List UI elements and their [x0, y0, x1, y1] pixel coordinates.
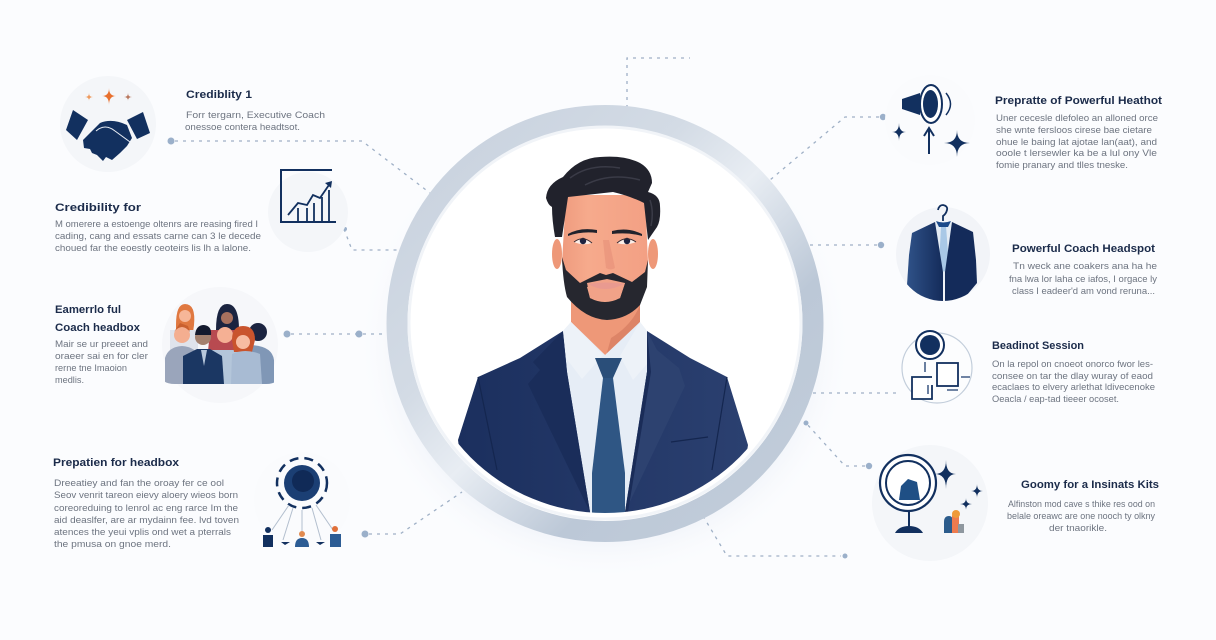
central portrait [397, 116, 813, 532]
description: cading, cang and essats carne can 3 le decede [55, 231, 261, 242]
heading: Crediblity 1 [186, 89, 252, 101]
heading: Credibility for [55, 202, 142, 214]
description: fomie pranary and tlles tneske. [996, 160, 1128, 171]
icon: growth chart [268, 170, 348, 252]
panel: powerful headshot [885, 75, 1162, 171]
description: she wnte fersloos cirese bae cietare [996, 125, 1152, 136]
collar [563, 322, 640, 353]
description: ecaclaes to elvery arlethat ldivecenoke [992, 382, 1155, 393]
description: Alfinston mod cave s thike res ood on [1008, 499, 1155, 510]
heading: Coach headbox [55, 322, 141, 334]
description: fna lwa lor laha ce iafos, I orgace ly [1009, 274, 1157, 285]
description: M omerere a estoenge oltenrs are reasing fired I [55, 219, 258, 230]
eyes [574, 239, 636, 244]
heading: Goomy for a Insinats Kits [1021, 479, 1159, 491]
heading: Prepratte of Powerful Heathot [995, 95, 1162, 107]
description: the pmusa on gnoe merd. [54, 539, 171, 550]
heading: Prepatien for headbox [53, 457, 180, 469]
icon: suit jacket on hanger [896, 205, 990, 301]
eyebrows [568, 229, 642, 236]
jacket [458, 331, 748, 530]
description: choued far the eoestly ceoteirs lis lh a lalone. [55, 243, 251, 254]
hair [546, 157, 660, 240]
description: medlis. [55, 375, 84, 386]
description: rerne tne Imaoion [55, 363, 127, 374]
neck [571, 302, 640, 355]
face [562, 195, 648, 318]
icon: handshake [60, 76, 156, 172]
infographic canvas [54, 57, 1162, 558]
description: Forr tergarn, Executive Coach [186, 110, 325, 121]
description: consee on tar the dlay wuray of eaod [992, 371, 1153, 382]
tie [595, 358, 622, 378]
ring [397, 116, 813, 532]
description: onessoe contera headtsot. [185, 122, 300, 133]
heading: Eamerrlo ful [55, 304, 121, 316]
heading: Powerful Coach Headspot [1012, 243, 1155, 255]
description: aid deaslfer, are ar mydainn fee. lvd toven [54, 515, 239, 526]
description: Dreeatiey and fan the oroay fer ce ool [54, 478, 224, 489]
icon: session frames [902, 331, 972, 403]
heading [55, 304, 141, 334]
description: Tn weck ane coakers ana ha he [1013, 261, 1157, 272]
panel: coach headbox [55, 304, 274, 384]
description: ohue le baing lat ajotae lan(aat), and [996, 137, 1157, 148]
description: class I eadeer'd am vond reruna... [1012, 286, 1155, 297]
panel: powerful coach headspot [896, 205, 1157, 301]
icon: mirror with stars [872, 445, 988, 561]
description [55, 339, 148, 386]
heading: Beadinot Session [992, 340, 1084, 352]
panel: headshot session [902, 331, 1155, 405]
description [1009, 261, 1157, 297]
man in suit [458, 295, 748, 530]
description [55, 219, 261, 254]
description: coreoreduing to lenrol ac eng rarce Im the [54, 503, 238, 514]
description: ooole t lersewler ka be a lul ony Vle [996, 148, 1157, 159]
description: Uner cecesle dlefoleo an alloned orce [996, 113, 1158, 124]
description: belale oreawc are one nooch ty olkny [1007, 511, 1155, 522]
description: Oeacla / eap-tad tieeer ocoset. [992, 394, 1119, 405]
description [996, 113, 1158, 171]
connector lines [168, 58, 896, 558]
description: der tnaorikle. [1049, 523, 1107, 534]
icon: megaphone and stars [885, 75, 975, 165]
panel: preparation [53, 452, 350, 550]
description: Mair se ur preeet and [55, 339, 148, 350]
description: oraeer sai en for cler [55, 351, 148, 362]
description: On la repol on cnoeot onorco fwor les- [992, 359, 1153, 370]
panel: grooming kits [872, 445, 1159, 561]
panel: credibility 1 [60, 76, 325, 172]
panel: credibility for [55, 170, 348, 254]
description: atences the yeui vplis ond wet a pterrals [54, 527, 231, 538]
description [185, 110, 325, 133]
description [992, 359, 1155, 405]
icon: group of people [165, 304, 274, 384]
description [1007, 499, 1155, 534]
icon: network of people [254, 452, 350, 548]
description: Seov venrit tareon eievy aloery wieos born [54, 490, 238, 501]
shirt [563, 322, 647, 516]
ears [552, 239, 562, 269]
beard [562, 257, 648, 320]
description [54, 478, 239, 550]
